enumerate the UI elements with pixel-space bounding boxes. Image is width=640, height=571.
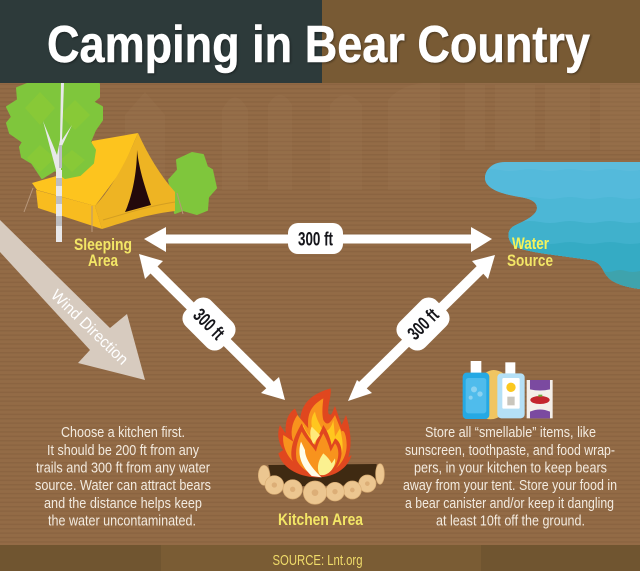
sponge xyxy=(485,370,503,419)
label: water source xyxy=(507,234,553,270)
arrow: wind direction xyxy=(0,220,145,380)
text: kitchen advice: Choose a kitchen first. xyxy=(61,424,185,441)
icon: campfire xyxy=(258,388,384,504)
tent front xyxy=(95,133,175,229)
icon: birch trunk xyxy=(43,83,72,242)
arrow: sleeping to kitchen, 300 ft: 300 ft xyxy=(188,305,228,345)
water source lake xyxy=(485,162,640,289)
icon: small bush xyxy=(169,153,216,214)
text: kitchen advice: source. Water can attract bears xyxy=(35,477,211,494)
blue bottle xyxy=(471,361,481,373)
footer bar xyxy=(0,545,640,571)
wind direction label: Wind Direction xyxy=(47,287,131,369)
icon: smellable items xyxy=(463,361,553,419)
text: storage advice xyxy=(403,424,617,530)
text: storage advice: at least 10ft off the ground. xyxy=(436,512,585,530)
text: kitchen advice xyxy=(35,424,211,530)
text: kitchen advice: trails and 300 ft from any water xyxy=(36,460,210,476)
icon: large tree xyxy=(7,84,102,178)
faint forest silhouettes xyxy=(125,83,640,190)
flames xyxy=(278,388,352,477)
text: kitchen advice: the water uncontaminated. xyxy=(48,512,196,530)
logs xyxy=(268,464,377,487)
icon: tent xyxy=(24,133,183,232)
lotion bottle xyxy=(505,362,515,374)
text: storage advice: Store all “smellable” items, like xyxy=(425,424,596,441)
arrow: sleeping to kitchen, 300 ft xyxy=(139,254,285,400)
header bar xyxy=(0,0,640,83)
label: water source: Source xyxy=(507,251,553,270)
guy ropes xyxy=(24,188,183,232)
source text: SOURCE: Lnt.org xyxy=(272,552,362,569)
text: kitchen advice: It should be 200 ft from any xyxy=(47,442,199,459)
tent door xyxy=(125,150,151,212)
arrow: sleeping to water, 300 ft xyxy=(144,223,492,254)
arrow: water to kitchen, 300 ft xyxy=(348,255,495,401)
label: kitchen area: Kitchen Area xyxy=(278,510,363,529)
label: water source: Water xyxy=(512,234,549,253)
tent roof side xyxy=(32,133,138,206)
text: storage advice: pers, in your kitchen to keep bears xyxy=(414,460,607,476)
label: sleeping area: Area xyxy=(88,251,118,270)
arrow: water to kitchen, 300 ft: 300 ft xyxy=(404,305,444,345)
label: sleeping area xyxy=(74,235,132,270)
arrow: sleeping to water, 300 ft: 300 ft xyxy=(298,230,333,250)
tent side wall xyxy=(36,190,102,229)
text: kitchen advice: and the distance helps keep xyxy=(44,495,202,512)
snack pouch xyxy=(527,380,553,418)
label: sleeping area: Sleeping xyxy=(74,235,132,254)
